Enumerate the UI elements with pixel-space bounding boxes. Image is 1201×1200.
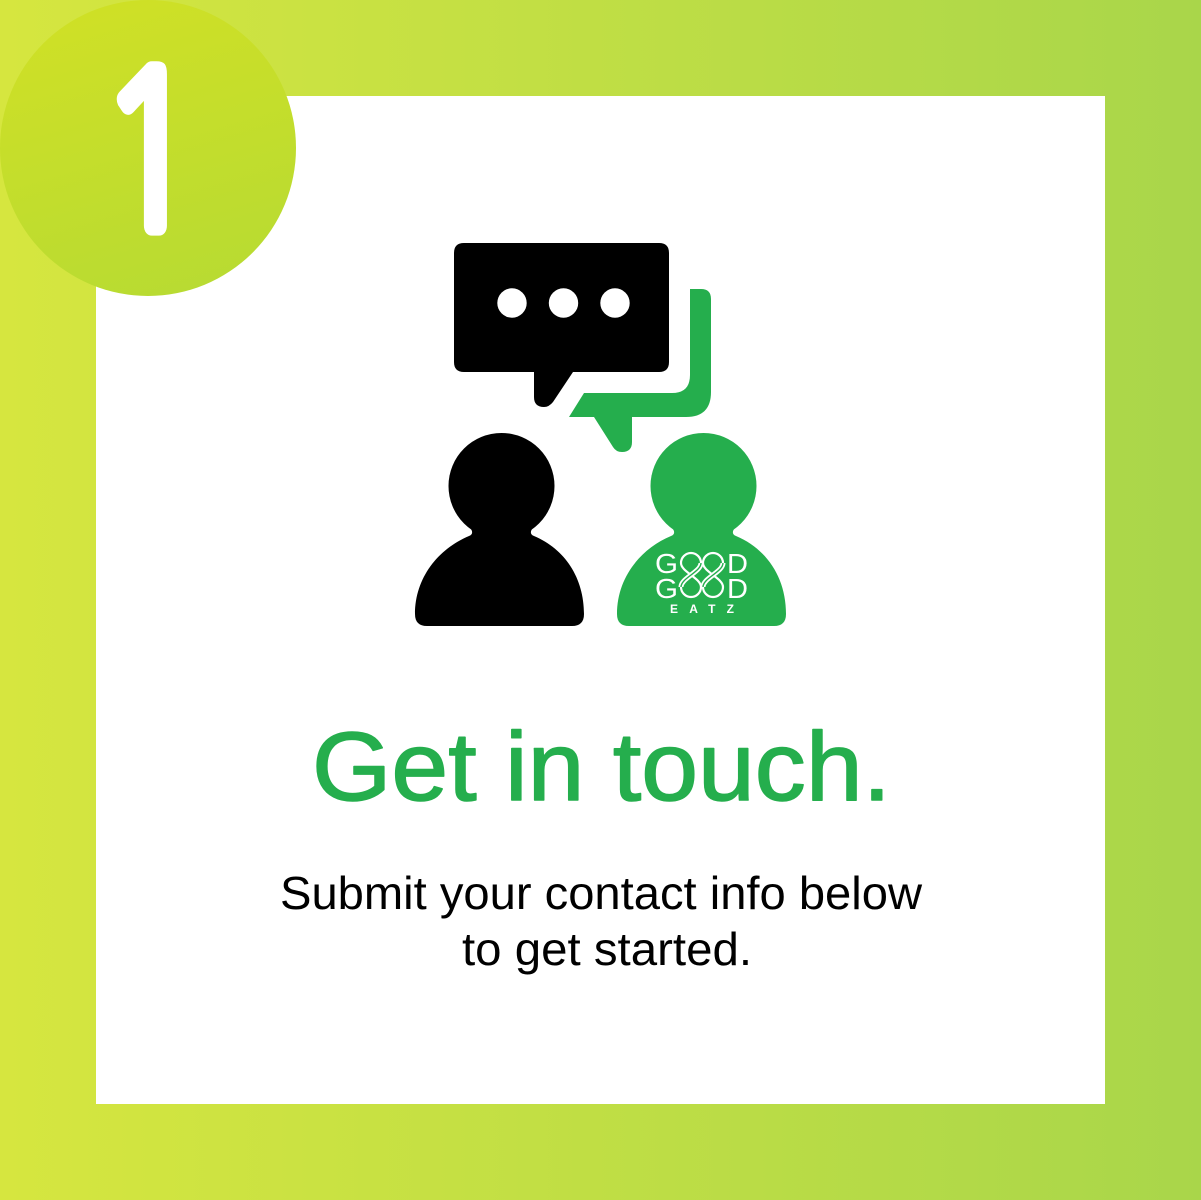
description text: Submit your contact info below (280, 867, 923, 919)
icon: green person with logo (617, 433, 786, 626)
logo: Good Good Eatz: G (655, 548, 678, 579)
white content panel (96, 96, 1105, 1104)
logo: Good Good Eatz: G (655, 573, 678, 604)
logo: Good Good Eatz: D (727, 573, 748, 604)
title: Get in touch. (312, 712, 891, 821)
icon: black person (415, 433, 584, 626)
step number badge: 1 (98, 45, 202, 260)
logo: Good Good Eatz (655, 548, 748, 616)
icon: black speech bubble (454, 243, 669, 407)
icon: two people chatting (415, 243, 786, 626)
logo: Good Good Eatz: D (727, 548, 748, 579)
step number badge (0, 0, 296, 296)
description text (280, 867, 923, 975)
logo: Good Good Eatz: EATZ (670, 602, 734, 616)
icon: green speech bubble (569, 289, 711, 452)
description text: to get started. (462, 923, 752, 975)
